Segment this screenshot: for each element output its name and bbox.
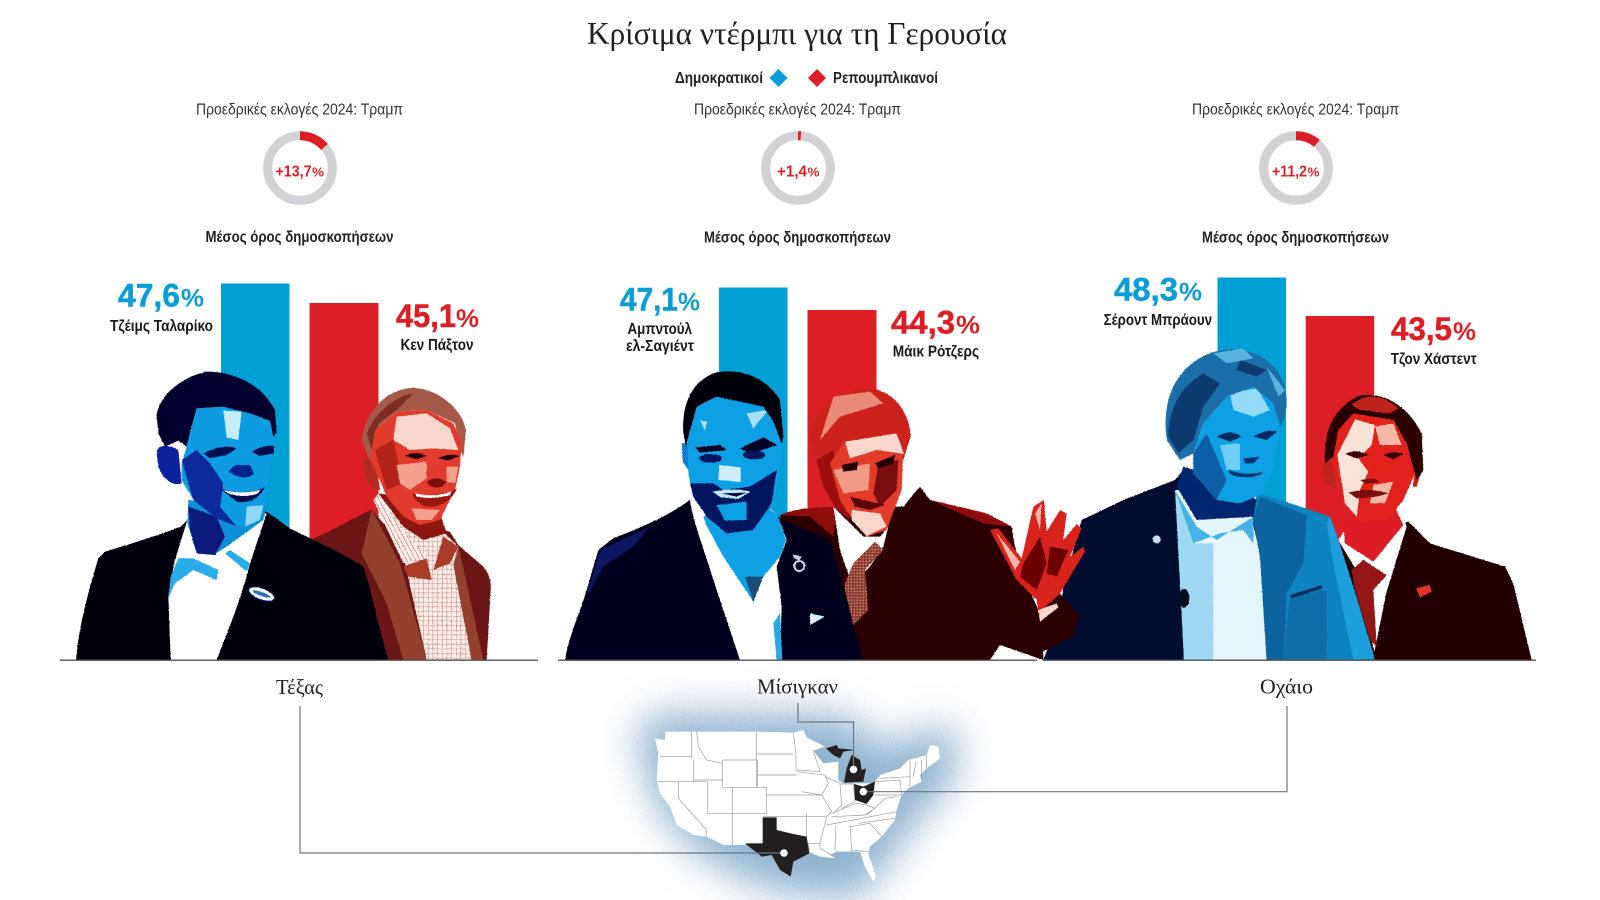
poll average heading: Μέσος όρος δημοσκοπήσεων (1202, 230, 1389, 246)
value: 44.3%: 44,3 (891, 304, 955, 340)
panel: Ohio header (1192, 102, 1399, 246)
state label: Michigan: Μίσιγκαν (757, 674, 838, 698)
connector: Texas (300, 706, 784, 853)
icon: blue diamond (770, 69, 788, 87)
donut: Trump +1.4% (766, 136, 830, 200)
value: 43.5%: % (1453, 318, 1476, 346)
title: Κρίσιμα ντέρμπι για τη Γερουσία (587, 15, 1007, 51)
portrait: Jon Husted (1323, 395, 1532, 660)
name: El-Sayed: Αμπντούλ (628, 321, 692, 338)
bar: Talarico 47.6% (221, 284, 290, 660)
bar chart: Texas (110, 278, 479, 660)
portrait: Ken Paxton (313, 388, 491, 660)
value: 45.1%: % (456, 305, 479, 333)
name: Talarico: Τζέιμς Ταλαρίκο (110, 318, 213, 335)
bar: Brown 48.3% (1218, 278, 1286, 660)
bar chart: Michigan (620, 282, 980, 660)
baseline: Michigan (558, 660, 1037, 661)
marker: Ohio (860, 788, 867, 796)
value: 45.1%: 45,1 (396, 298, 456, 334)
legend label: Democrats: Δημοκρατικοί (675, 70, 763, 87)
value: 44.3%: % (956, 312, 980, 340)
donut: Trump +1.4%: +1,4 (777, 164, 807, 180)
portrait: Mike Rogers (780, 388, 1085, 660)
name: El-Sayed (626, 321, 694, 355)
donut: Trump +11.2% (1264, 136, 1328, 200)
state: Ohio (854, 782, 875, 804)
value: 48.3%: % (1179, 278, 1202, 306)
marker: Texas (780, 849, 788, 857)
bar: Paxton 45.1% (310, 303, 378, 660)
portrait: Sherrod Brown (1043, 348, 1374, 660)
baseline: Texas (60, 660, 538, 661)
donut: Trump +13.7% (268, 136, 332, 200)
state label: Ohio: Οχάιο (1260, 674, 1313, 698)
state: Texas (745, 817, 809, 877)
baseline: Ohio (1043, 660, 1536, 661)
poll average heading: Μέσος όρος δημοσκοπήσεων (206, 229, 394, 246)
presidential election label: Προεδρικές εκλογές 2024: Τραμπ (1192, 102, 1399, 118)
legend label: Republicans: Ρεπουμπλικανοί (833, 70, 938, 87)
portrait: James Talarico (76, 372, 388, 660)
name: Rogers: Μάικ Ρότζερς (893, 344, 979, 360)
bar: Rogers 44.3% (808, 310, 876, 660)
value: 47.6%: 47,6 (118, 278, 180, 314)
connector: Michigan (798, 703, 854, 769)
white ground below portraits (0, 660, 1600, 668)
name: Brown: Σέροντ Μπράουν (1104, 312, 1212, 329)
presidential election label: Προεδρικές εκλογές 2024: Τραμπ (196, 102, 403, 118)
donut: Trump +11.2%: % (1308, 166, 1320, 180)
value: 47.1%: 47,1 (620, 282, 678, 318)
map glow (655, 732, 940, 880)
bar: El-Sayed 47.1% (719, 288, 788, 660)
panel: Michigan header (694, 102, 901, 246)
name: Paxton: Κεν Πάξτον (400, 337, 474, 354)
states silhouette (655, 730, 940, 882)
icon: red diamond (808, 69, 826, 87)
donut: Trump +13.7%: +13,7 (276, 164, 312, 180)
donut: Trump +13.7%: % (312, 166, 324, 180)
value: 47.1%: % (678, 288, 700, 316)
connector: Ohio (863, 706, 1287, 792)
state label: Texas: Τέξας (276, 675, 324, 699)
value: 48.3%: 48,3 (1114, 272, 1178, 308)
poll average heading: Μέσος όρος δημοσκοπήσεων (704, 230, 891, 246)
legend (675, 69, 938, 87)
presidential election label: Προεδρικές εκλογές 2024: Τραμπ (694, 102, 901, 118)
value: 43.5%: 43,5 (1391, 311, 1452, 347)
portrait: Abdul El-Sayed (565, 371, 863, 660)
name: El-Sayed: ελ-Σαγιέντ (626, 338, 694, 355)
bar: Husted 43.5% (1306, 316, 1374, 660)
state: Michigan (826, 745, 866, 783)
marker: Michigan (850, 766, 857, 773)
donut: Trump +1.4%: % (808, 166, 820, 180)
panel: Texas header (196, 102, 403, 246)
bar chart: Ohio (1104, 272, 1477, 660)
map: United States (655, 730, 940, 882)
donut: Trump +11.2%: +11,2 (1272, 164, 1307, 180)
value: 47.6%: % (181, 284, 204, 312)
name: Husted: Τζον Χάστεντ (1391, 351, 1477, 368)
state borders (657, 732, 927, 858)
